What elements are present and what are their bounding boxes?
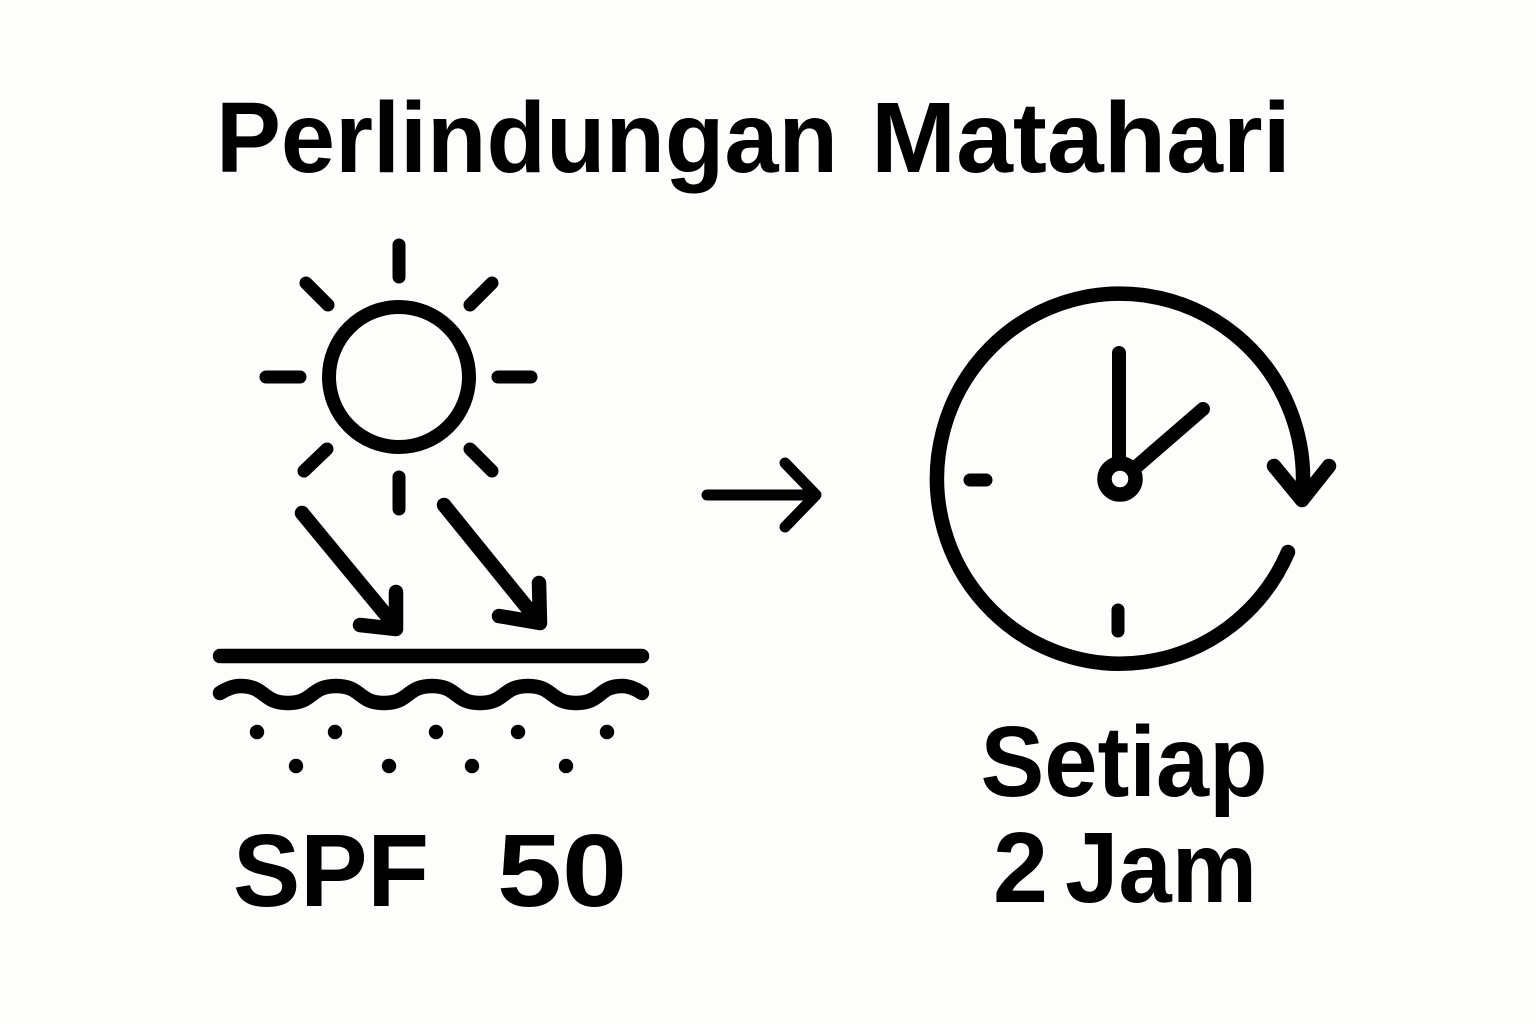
clock hands: [1119, 353, 1203, 467]
time label line 2: 2: [993, 812, 1048, 924]
time label line 1: Setiap: [980, 706, 1268, 818]
icon: skin layers: [220, 656, 642, 773]
title: [216, 82, 1291, 194]
icon: sun rays arrows: [302, 505, 540, 629]
clock arrow head: [1274, 466, 1329, 500]
title: Perlindungan: [216, 82, 838, 194]
clock center: [1104, 464, 1136, 494]
SPF value: 50: [497, 813, 627, 928]
title: Matahari: [871, 82, 1291, 194]
clock circular arrow ring: [937, 294, 1303, 664]
icon: clock: [937, 294, 1329, 664]
clock ticks: [970, 480, 1118, 631]
arrow: [707, 463, 816, 527]
time label line 2: Jam: [1065, 812, 1257, 924]
icon: sun with rays: [266, 245, 531, 509]
SPF label: SPF: [233, 813, 429, 928]
